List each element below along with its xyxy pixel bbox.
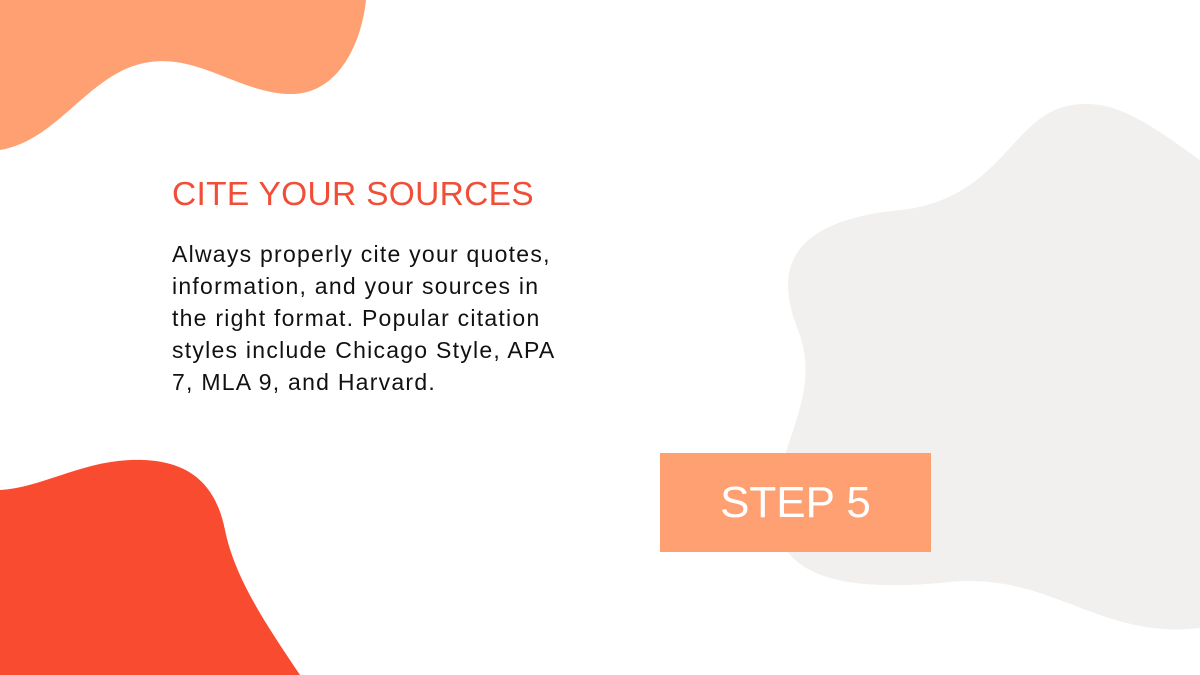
body text: 7, MLA 9, and Harvard. xyxy=(172,369,436,395)
body text: Always properly cite your quotes, xyxy=(172,241,551,267)
body text: information, and your sources in xyxy=(172,273,539,299)
blob: red bottom-left xyxy=(0,460,300,675)
body text: styles include Chicago Style, APA xyxy=(172,337,555,363)
step badge: STEP 5 xyxy=(720,478,871,526)
step badge xyxy=(660,453,931,552)
blob: peach top-left xyxy=(0,0,366,150)
body text: the right format. Popular citation xyxy=(172,305,540,331)
blob: gray right xyxy=(776,104,1200,629)
title: CITE YOUR SOURCES xyxy=(172,176,534,213)
body text xyxy=(172,241,555,395)
